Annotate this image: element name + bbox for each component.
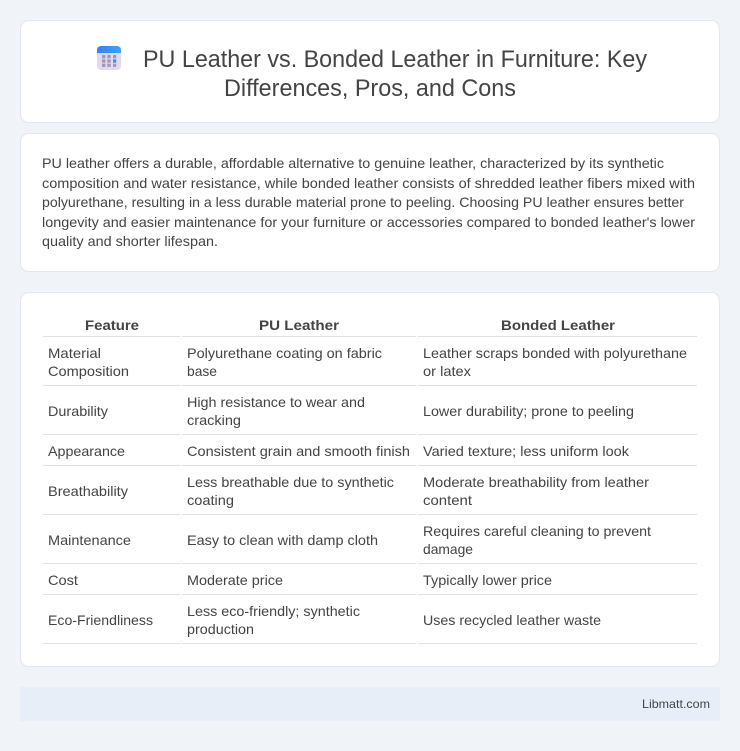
comparison table panel — [20, 292, 720, 666]
row: eco-friendliness: Less eco-friendly; synthetic — [187, 603, 360, 619]
title: PU Leather vs. Bonded Leather in Furniture: Key — [143, 46, 647, 73]
intro paragraph: longevity and easier maintenance for your furniture or accessories compared to bonded leather's lower — [42, 214, 695, 230]
row: breathability: Breathability — [48, 483, 128, 499]
row: breathability: coating — [187, 492, 234, 508]
intro text panel — [20, 134, 720, 272]
row: breathability: Moderate breathability from leather — [423, 474, 649, 490]
intro paragraph: composition and water resistance, while bonded leather consists of shredded leather fibers mixed with — [42, 175, 695, 191]
intro paragraph: PU leather offers a durable, affordable alternative to genuine leather, characterized by its synthetic — [42, 155, 664, 171]
row: material composition: Leather scraps bonded with polyurethane — [423, 345, 687, 361]
row: durability: Lower durability; prone to peeling — [423, 403, 634, 419]
row: breathability: content — [423, 492, 472, 508]
row: durability — [48, 394, 634, 428]
header panel — [20, 20, 720, 122]
row: material composition: Composition — [48, 363, 129, 379]
table header row: PU Leather — [259, 317, 340, 333]
row: appearance — [48, 443, 630, 459]
row: maintenance: Easy to clean with damp cloth — [187, 532, 378, 548]
title — [143, 46, 647, 102]
footer credit: Libmatt.com — [642, 697, 710, 711]
row: maintenance — [48, 523, 651, 557]
table header row: Bonded Leather — [501, 317, 616, 333]
row: material composition: or latex — [423, 363, 471, 379]
intro paragraph: quality and shorter lifespan. — [42, 233, 218, 249]
row: durability: Durability — [48, 403, 108, 419]
row: cost — [48, 572, 552, 588]
row: cost: Cost — [48, 572, 78, 588]
row: breathability: Less breathable due to synthetic — [187, 474, 394, 490]
row: durability: High resistance to wear and — [187, 394, 365, 410]
icon: calendar — [97, 46, 121, 70]
row: cost: Typically lower price — [423, 572, 552, 588]
row: breathability — [48, 474, 649, 508]
row: durability: cracking — [187, 412, 241, 428]
row: material composition: base — [187, 363, 217, 379]
row: maintenance: damage — [423, 541, 473, 557]
row: appearance: Varied texture; less uniform look — [423, 443, 630, 459]
intro paragraph: polyurethane, resulting in a less durable material prone to peeling. Choosing PU leather ensures better — [42, 194, 684, 210]
row: maintenance: Requires careful cleaning to prevent — [423, 523, 651, 539]
title: Differences, Pros, and Cons — [224, 75, 516, 102]
row: maintenance: Maintenance — [48, 532, 131, 548]
row: material composition: Material — [48, 345, 101, 361]
row: material composition: Polyurethane coating on fabric — [187, 345, 382, 361]
footer bar — [20, 687, 720, 721]
row: material composition — [48, 345, 687, 379]
row: appearance: Consistent grain and smooth finish — [187, 443, 410, 459]
row: eco-friendliness: production — [187, 621, 254, 637]
table header row — [85, 317, 616, 333]
row: eco-friendliness: Uses recycled leather waste — [423, 612, 601, 628]
row: cost: Moderate price — [187, 572, 283, 588]
row: eco-friendliness — [48, 603, 601, 637]
table header row: Feature — [85, 317, 139, 333]
row: appearance: Appearance — [48, 443, 125, 459]
row: eco-friendliness: Eco-Friendliness — [48, 612, 153, 628]
intro paragraph — [42, 155, 695, 249]
